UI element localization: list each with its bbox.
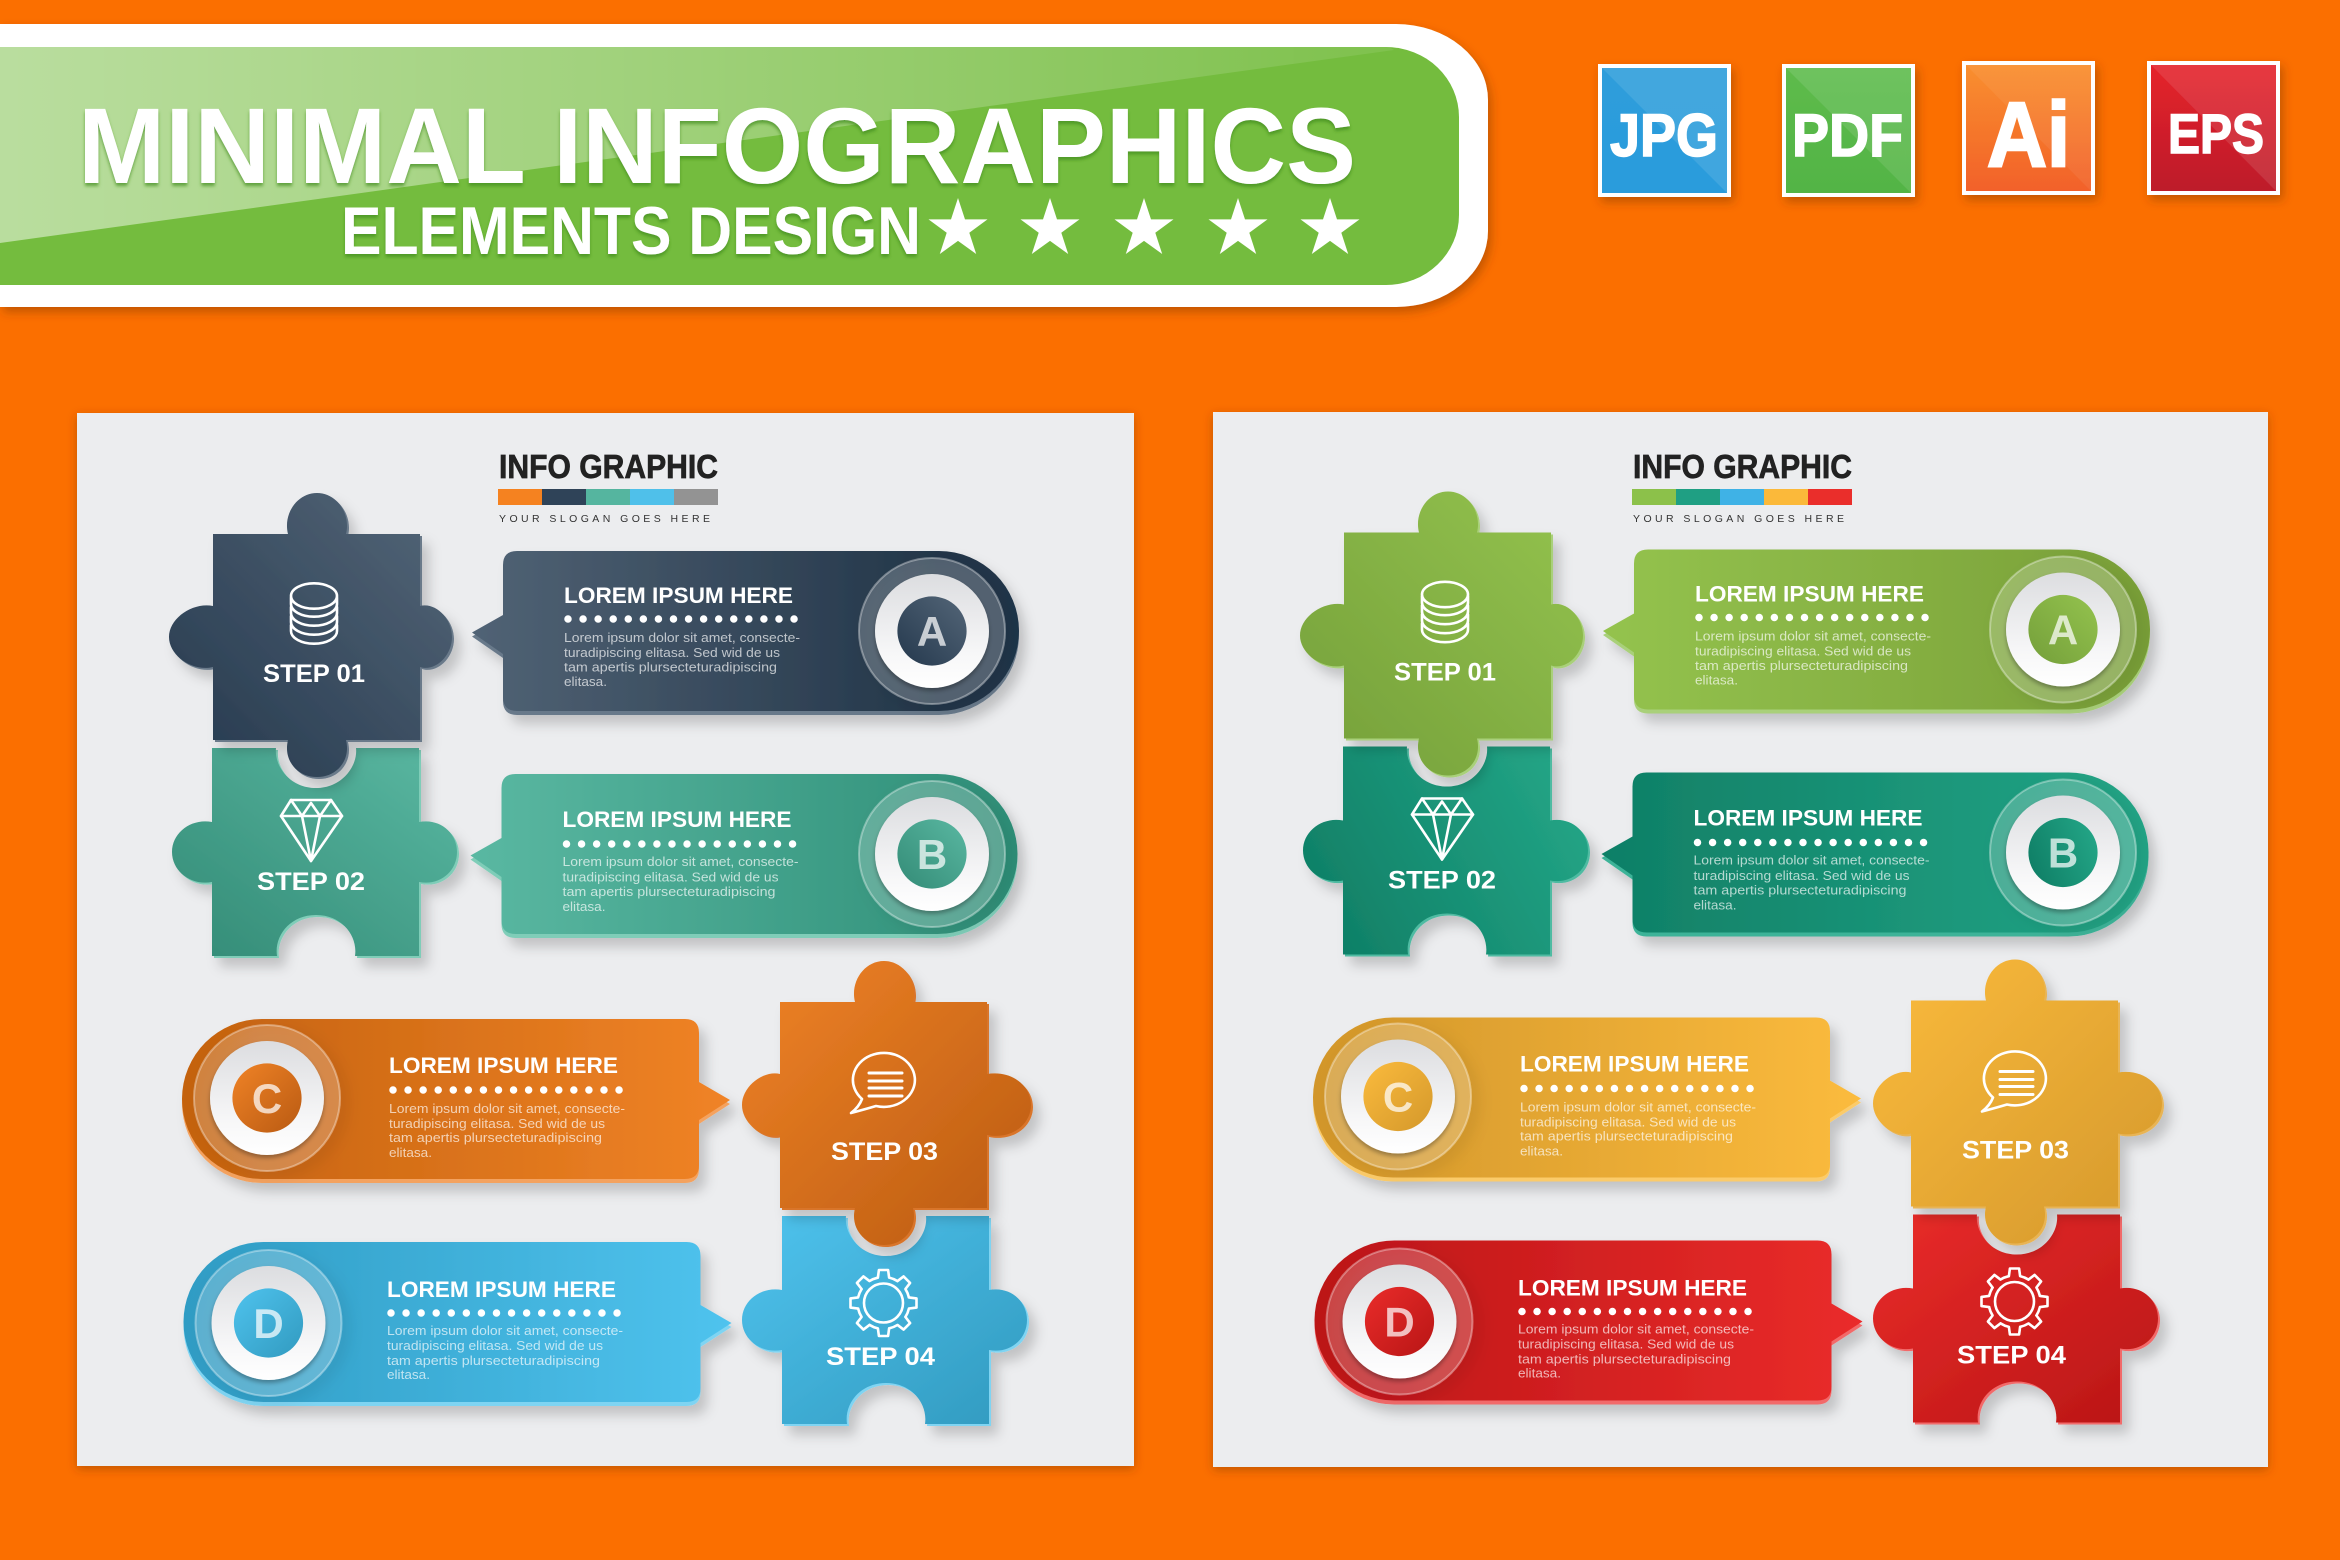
banner B [470,774,1018,938]
label: step 03: STEP 03 [1962,1136,2069,1164]
white pill [0,24,1488,307]
banner D: elitasa. [1518,1366,1561,1380]
banner D: LOREM IPSUM HERE [387,1277,616,1302]
banner A: LOREM IPSUM HERE [1695,582,1924,606]
banner C: turadipiscing elitasa. Sed wid de us [1520,1114,1737,1130]
banner D: tam apertis plursecteturadipiscing [1518,1352,1731,1366]
banner B: LOREM IPSUM HERE [562,807,792,832]
badge: Ai: Ai [1987,84,2070,186]
banner D [184,1242,732,1406]
heading: info graphic: INFO GRAPHIC [499,448,718,485]
banner B [1602,772,2148,936]
label: step 01: STEP 01 [1394,658,1496,686]
icon: coins [1422,582,1468,642]
banner B: turadipiscing elitasa. Sed wid de us [562,870,779,884]
icon: diamond [1412,798,1473,860]
banner C [182,1019,730,1183]
puzzle: step 03 [742,961,1033,1247]
icon: gear [1981,1268,2048,1335]
puzzle: step 04 [742,1216,1029,1426]
banner B: B [2048,830,2078,876]
banner C: tam apertis plursecteturadipiscing [389,1130,602,1145]
banner D: Lorem ipsum dolor sit amet, consecte- [1518,1322,1754,1336]
banner D: turadipiscing elitasa. Sed wid de us [1518,1336,1735,1352]
banner A [472,551,1019,715]
banner B: Lorem ipsum dolor sit amet, consecte- [562,854,798,869]
puzzle: step 02 [172,748,459,958]
gloss highlight [0,47,1394,243]
badge: Ai [1962,61,2095,195]
heading: info graphic [498,448,718,525]
heading: info graphic [1632,448,1852,525]
green pill [0,47,1459,285]
banner A: tam apertis plursecteturadipiscing [1695,658,1908,673]
banner B: tam apertis plursecteturadipiscing [562,884,776,899]
main title: MINIMAL INFOGRAPHICS [78,85,1356,206]
rating stars [928,198,1360,254]
banner B: elitasa. [562,899,606,914]
banner C: tam apertis plursecteturadipiscing [1520,1128,1733,1144]
banner A: Lorem ipsum dolor sit amet, consecte- [564,630,800,645]
banner C: elitasa. [1520,1144,1563,1158]
panel: left infographic [77,413,1134,1466]
banner D: D [253,1300,284,1347]
banner B: B [917,831,947,878]
label: step 03: STEP 03 [831,1138,938,1166]
banner C: turadipiscing elitasa. Sed wid de us [389,1116,606,1131]
banner A: A [2048,606,2078,654]
puzzle: step 02 [1303,746,1590,956]
label: step 01: STEP 01 [263,660,365,688]
icon: gear [850,1270,917,1336]
banner D: tam apertis plursecteturadipiscing [387,1353,600,1368]
banner C: LOREM IPSUM HERE [389,1053,618,1078]
badge: EPS [2147,61,2280,195]
badge: JPG: JPG [1610,102,1718,169]
banner A: LOREM IPSUM HERE [564,583,793,608]
banner C: C [1383,1074,1413,1120]
banner C: elitasa. [389,1145,432,1160]
banner C: Lorem ipsum dolor sit amet, consecte- [1520,1100,1756,1114]
banner B: Lorem ipsum dolor sit amet, consecte- [1694,852,1930,868]
puzzle: step 03 [1873,960,2164,1246]
banner A [1603,550,2150,714]
heading: info graphic: YOUR SLOGAN GOES HERE [499,513,710,525]
panel: right infographic [1213,412,2268,1467]
banner B: turadipiscing elitasa. Sed wid de us [1694,868,1910,883]
banner C: LOREM IPSUM HERE [1520,1052,1749,1076]
heading: info graphic: INFO GRAPHIC [1633,448,1852,485]
banner A: turadipiscing elitasa. Sed wid de us [564,645,781,660]
banner C: Lorem ipsum dolor sit amet, consecte- [389,1101,625,1116]
puzzle: step 01 [169,493,454,779]
banner B: LOREM IPSUM HERE [1694,806,1922,830]
puzzle: step 01 [1300,492,1585,778]
label: step 02: STEP 02 [1388,866,1496,894]
banner A: elitasa. [1695,672,1738,688]
banner A: turadipiscing elitasa. Sed wid de us [1695,644,1912,658]
badge: EPS: EPS [2168,102,2264,165]
banner C: C [252,1075,282,1122]
label: step 02: STEP 02 [257,868,365,896]
banner A: A [917,608,947,655]
banner D: turadipiscing elitasa. Sed wid de us [387,1338,604,1353]
banner A: elitasa. [564,674,607,689]
banner D: D [1384,1298,1415,1346]
badge: PDF: PDF [1792,102,1903,169]
banner D [1314,1240,1862,1404]
banner D: Lorem ipsum dolor sit amet, consecte- [387,1323,623,1338]
label: step 04: STEP 04 [1957,1342,2066,1370]
banner D: LOREM IPSUM HERE [1518,1276,1747,1300]
label: step 04: STEP 04 [826,1343,935,1371]
banner B: tam apertis plursecteturadipiscing [1694,882,1906,898]
banner C [1313,1018,1861,1182]
banner A: Lorem ipsum dolor sit amet, consecte- [1695,628,1931,644]
subtitle: ELEMENTS DESIGN [341,193,921,269]
icon: diamond [281,800,342,861]
banner D: elitasa. [387,1367,430,1382]
badge: JPG [1598,64,1731,197]
icon: chat bubble [1982,1051,2046,1112]
icon: coins [291,583,337,644]
heading: info graphic: YOUR SLOGAN GOES HERE [1633,513,1844,525]
header banner [0,24,1488,307]
icon: chat bubble [851,1053,915,1113]
badge: PDF [1782,64,1915,197]
banner A: tam apertis plursecteturadipiscing [564,660,777,674]
puzzle: step 04 [1873,1214,2160,1424]
banner B: elitasa. [1694,898,1737,912]
